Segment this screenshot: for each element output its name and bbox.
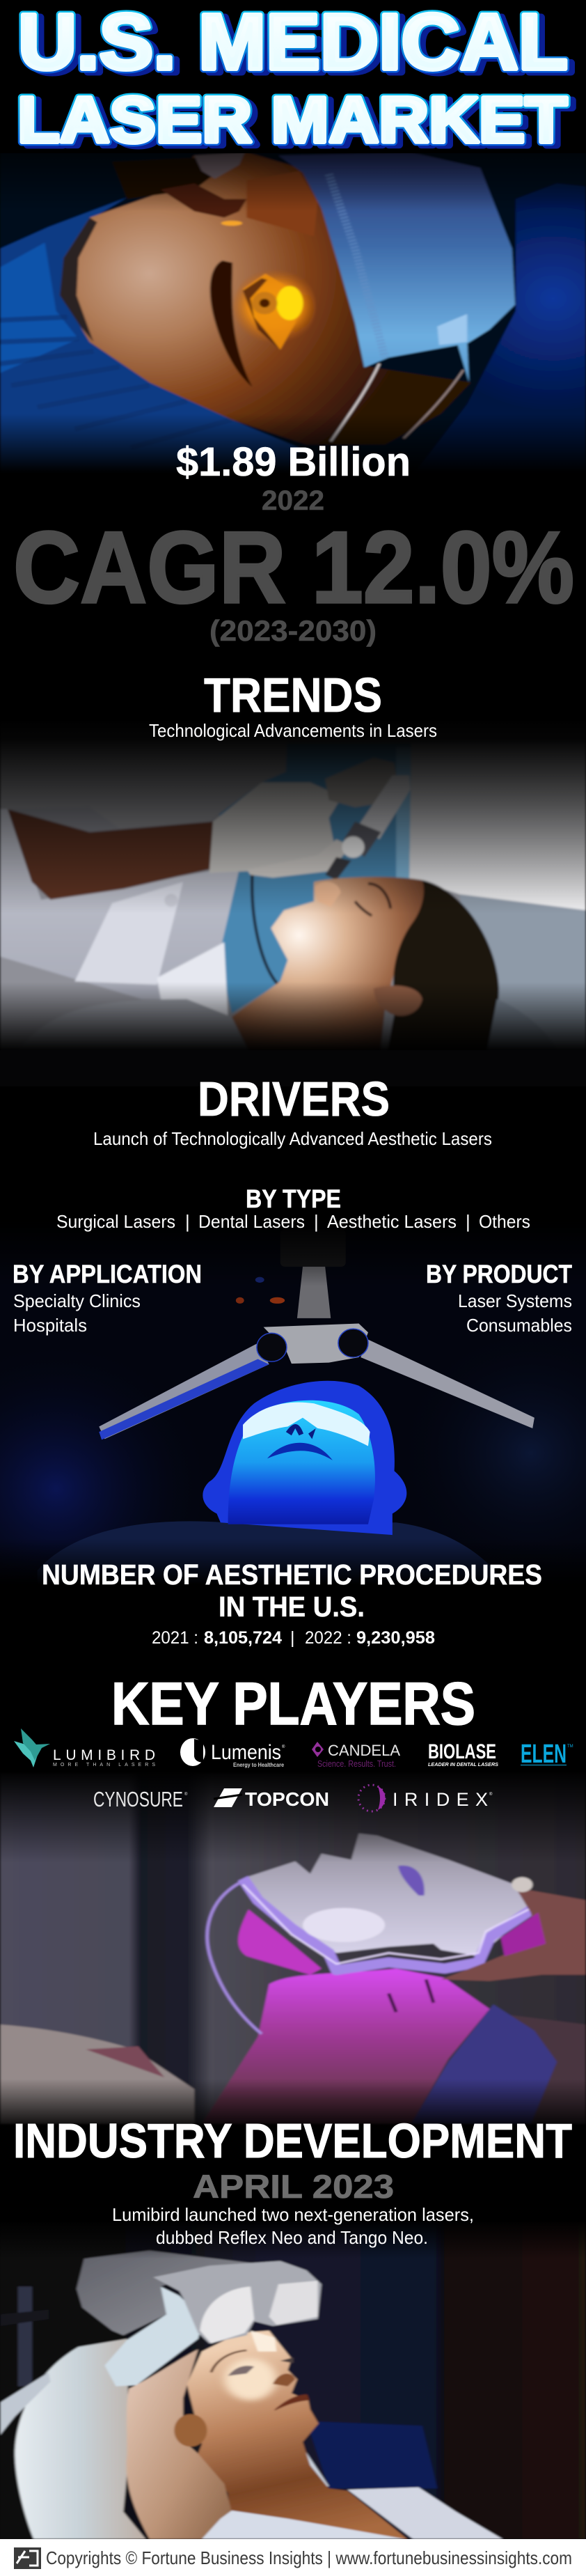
logo: Candela: [312, 1742, 400, 1769]
statistic: aesthetic procedures: [42, 1559, 542, 1648]
by type list: Aesthetic Lasers: [327, 1211, 457, 1232]
title line 1: U.S. MEDICAL: [18, 0, 568, 86]
logos: [14, 1728, 573, 1811]
development text: dubbed Reflex Neo and Tango Neo.: [156, 2227, 428, 2248]
statistic: aesthetic procedures: 2021 :: [152, 1628, 198, 1648]
development text: [112, 2204, 474, 2248]
trends heading: TRENDS: [204, 668, 382, 722]
drivers heading: DRIVERS: [198, 1072, 390, 1126]
logo: Lumenis: [180, 1738, 285, 1768]
logo: Iridex: IRIDEX: [393, 1789, 488, 1810]
by application: [13, 1260, 202, 1336]
by product: [426, 1260, 572, 1336]
by type list: |: [185, 1211, 190, 1232]
statistic: aesthetic procedures: NUMBER OF AESTHETIC PROCEDURES: [42, 1559, 542, 1591]
photo fade: [0, 2082, 586, 2125]
photo: LED light therapy: [0, 1244, 586, 1579]
by application: Specialty Clinics: [13, 1290, 141, 1311]
logo: Cynosure: ®: [184, 1792, 188, 1797]
by type heading: BY TYPE: [246, 1185, 341, 1213]
footer logo: [14, 2547, 41, 2569]
logo: Iridex: [358, 1785, 493, 1811]
statistic: aesthetic procedures: |: [290, 1628, 295, 1648]
title line 2: LASER MARKET: [17, 84, 567, 156]
logo: Candela: Science. Results. Trust.: [317, 1758, 396, 1769]
title line 1: U.S. MEDICAL: [18, 0, 568, 86]
by application: Hospitals: [13, 1315, 87, 1336]
statistic: aesthetic procedures: 8,105,724: [204, 1628, 282, 1648]
market size: $1.89 Billion: [176, 439, 411, 485]
title: [17, 0, 573, 159]
logo: Lumenis: Lumenis: [211, 1741, 281, 1764]
forecast period: (2023-2030): [209, 614, 377, 647]
development text: Lumibird launched two next-generation lasers,: [112, 2204, 474, 2225]
logo: Lumenis: ®: [282, 1744, 285, 1749]
photo: LED face mask: [0, 1770, 586, 2131]
photo fade: [0, 982, 586, 1052]
by application: BY APPLICATION: [13, 1260, 202, 1288]
logo: Lumibird: [14, 1728, 155, 1767]
development date: APRIL 2023: [193, 2168, 394, 2205]
statistic: aesthetic procedures: IN THE U.S.: [219, 1591, 365, 1623]
logo: Biolase: [428, 1740, 498, 1767]
photo: laser device over a reclining woman: [0, 2219, 586, 2539]
by product: Consumables: [466, 1315, 572, 1336]
logo: Iridex: ®: [489, 1792, 493, 1797]
logo: Biolase: BIOLASE: [428, 1740, 496, 1763]
logo: Lumenis: Energy to Healthcare: [233, 1762, 284, 1768]
by type list: Others: [479, 1211, 530, 1232]
logo: Candela: CANDELA: [328, 1742, 400, 1759]
logo: Lumibird: MORE THAN LASERS: [53, 1763, 155, 1767]
logo: Lumibird: LUMIBIRD: [53, 1747, 155, 1763]
drivers text: Launch of Technologically Advanced Aesthetic Lasers: [93, 1128, 492, 1149]
by type list: |: [466, 1211, 470, 1232]
logo: Topcon: TOPCON: [245, 1788, 329, 1810]
by type list: |: [314, 1211, 319, 1232]
by type list: Dental Lasers: [198, 1211, 305, 1232]
logo: Biolase: LEADER IN DENTAL LASERS: [428, 1763, 498, 1767]
title line 2: LASER MARKET: [23, 86, 573, 159]
trends text: Technological Advancements in Lasers: [149, 720, 437, 741]
statistic: aesthetic procedures: 2022 :: [305, 1628, 351, 1648]
by type list: [56, 1211, 530, 1232]
statistic: aesthetic procedures: 9,230,958: [356, 1628, 435, 1648]
title line 1: U.S. MEDICAL: [24, 1, 573, 88]
photo: laser eye surgery: [0, 153, 586, 469]
logo: Cynosure: CYNOSURE: [93, 1787, 183, 1811]
photo: practitioner treating a patient's face: [0, 742, 586, 1048]
by type list: Surgical Lasers: [56, 1211, 175, 1232]
title line 2: LASER MARKET: [17, 84, 567, 156]
logo: Elen: TM: [567, 1744, 573, 1749]
key players heading: KEY PLAYERS: [111, 1671, 475, 1738]
base year: 2022: [262, 485, 324, 516]
footer: [0, 2539, 586, 2576]
by product: Laser Systems: [458, 1290, 572, 1311]
